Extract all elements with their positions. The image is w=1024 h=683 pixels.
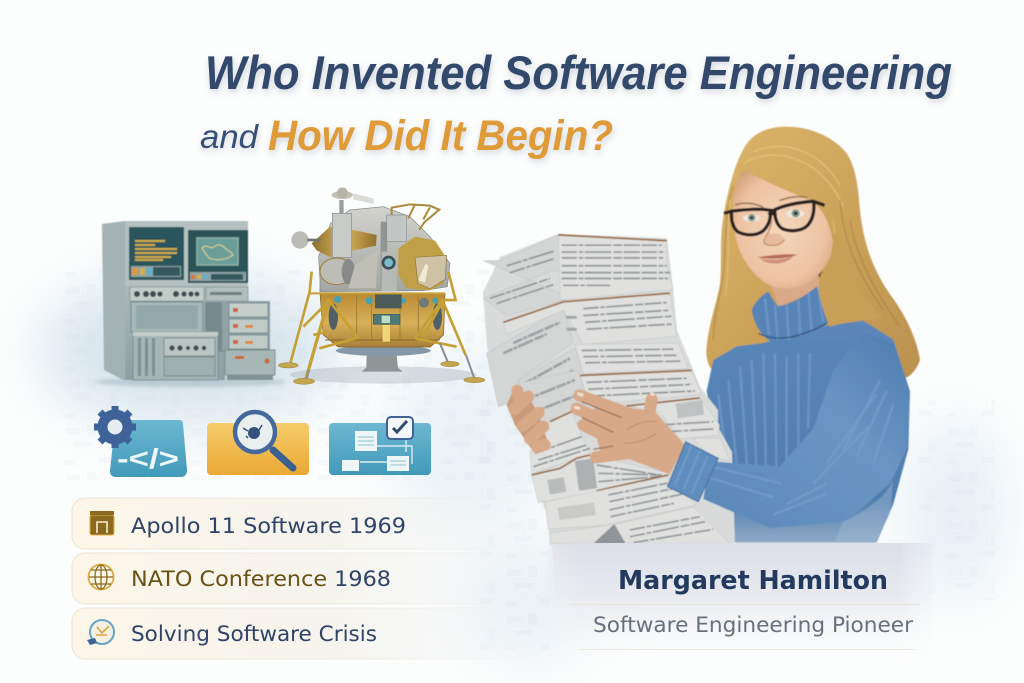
right monitor [188, 230, 248, 283]
antenna and sphere [291, 187, 439, 249]
left hand [507, 390, 550, 452]
icon: globe [88, 564, 114, 590]
right hand [575, 394, 685, 474]
icon: crisis [87, 620, 114, 645]
engine pedestal [362, 355, 403, 372]
icon: code and gear [94, 406, 187, 477]
book 9 [550, 507, 730, 544]
brows [735, 197, 807, 207]
book 8 [545, 477, 697, 529]
hair strand over shoulder [819, 230, 883, 327]
neck [768, 257, 821, 307]
code glyph: -</> [117, 443, 179, 474]
feet [278, 361, 485, 384]
eyes [743, 209, 804, 222]
left monitor [129, 227, 184, 280]
icon: flowchart [329, 417, 431, 475]
face [733, 170, 835, 289]
mouth [757, 254, 798, 259]
book 4 [580, 370, 702, 405]
descent stage [320, 293, 445, 347]
cuff [667, 442, 718, 502]
title line 2: and: and [200, 118, 260, 155]
lower books [518, 370, 731, 544]
book stack backing [483, 234, 735, 545]
label: NATO Conference 1968 [131, 567, 391, 591]
illustration: vintage computer [95, 221, 285, 387]
figure: Margaret Hamilton [483, 127, 920, 545]
title line 1: Who Invented Software Engineering [205, 46, 952, 99]
head [724, 170, 883, 345]
ascent stage [312, 207, 450, 308]
book 2 [487, 293, 677, 406]
hair [706, 127, 920, 378]
book 1 [483, 235, 673, 316]
illustration: lunar lander [278, 187, 485, 384]
panel: software crisis [72, 608, 542, 659]
book 5 [518, 370, 731, 461]
knob panel [130, 287, 248, 301]
book 3 [518, 343, 688, 418]
caption: name plate [552, 543, 926, 650]
panel: Apollo 11 [72, 498, 542, 549]
icon: apollo [90, 511, 114, 535]
legs [290, 272, 466, 380]
book stack [483, 235, 702, 418]
panel: NATO [72, 553, 542, 604]
title [200, 46, 952, 160]
sleeve [703, 333, 910, 545]
title line 2: how did it begin: How Did It Begin? [268, 112, 613, 160]
turtleneck [752, 286, 830, 345]
gear [94, 406, 136, 448]
drawers [222, 301, 275, 380]
sweater torso [707, 321, 910, 543]
role: Software Engineering Pioneer [593, 613, 913, 637]
label: Apollo 11 Software 1969 [131, 514, 406, 538]
name: Margaret Hamilton [618, 566, 888, 596]
lower console [133, 332, 218, 380]
hands and cuff [507, 390, 718, 502]
label: Solving Software Crisis [131, 622, 377, 646]
book 6 [530, 412, 590, 473]
nose [764, 220, 785, 245]
icon: magnifying glass [207, 412, 309, 475]
book 7 [532, 455, 670, 503]
glasses [724, 201, 825, 235]
